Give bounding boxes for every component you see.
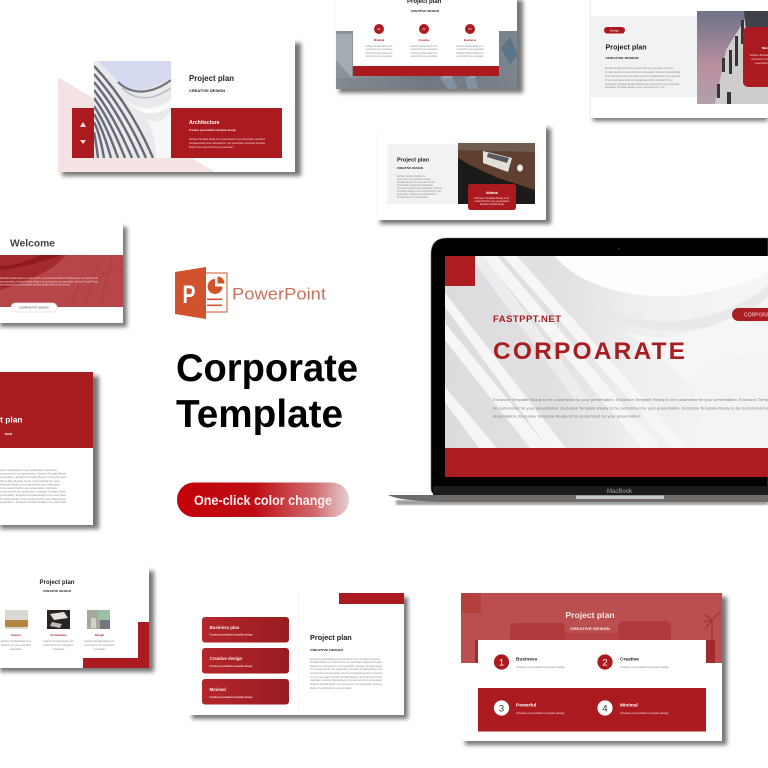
- item: interior: [1, 610, 31, 651]
- feature 4: minimal: Minimal: [620, 702, 638, 708]
- heading: Project plan: [189, 74, 234, 83]
- photo: laptop on desk: [458, 143, 535, 204]
- photo: building: [697, 11, 768, 104]
- column: minimal: customized for your presentation: [366, 54, 393, 58]
- red footer bar: [445, 448, 768, 477]
- MacBook label: MacBook: [607, 489, 633, 495]
- feature 3: powerful: Creative presentation template design: [516, 711, 566, 715]
- body text: to be customized for your presentation. Exclusive: [0, 486, 58, 490]
- banner text: Creative presentation template design: [189, 128, 236, 132]
- body text: customized for your presentation. Exclusive Template Ready: [0, 472, 67, 476]
- red callout card: [743, 27, 768, 87]
- card: creative design: [202, 648, 289, 674]
- red photo band: [0, 255, 123, 307]
- screen body text: Exclusive Template Ready to be customized for your presentation. Exclusive Template Ready to be customized for your presentation. Exclusive Temp: [493, 397, 768, 402]
- screen background: [445, 256, 768, 448]
- grey text panel: [591, 16, 697, 97]
- body text: to be customized for your presentation. Exclusive Template Ready to be customized: [605, 74, 680, 78]
- red header block: [0, 372, 93, 448]
- body text: [605, 66, 681, 89]
- card: minimal: Creative presentation template design: [210, 695, 253, 699]
- column: business: [456, 24, 484, 58]
- laptop screen: [445, 256, 768, 477]
- column: minimal: Exclusive Template Ready to be: [366, 51, 393, 55]
- item: design: Design: [95, 633, 104, 637]
- body text: Exclusive Template Ready to be customized for your presentation. Exclusive: [605, 66, 673, 70]
- body text: Template Ready to be customized for your presentation: [0, 482, 61, 486]
- card: minimal: [202, 679, 289, 704]
- body text: Template Ready to be customized for your presentation. Exclusive Template: [310, 660, 382, 664]
- body text: customized for your presentation. Exclusive Template Ready: [0, 490, 67, 494]
- body text: presentation. Exclusive Template Ready to be customized: [0, 500, 67, 504]
- column: minimal: customized for your presentation: [366, 47, 393, 51]
- card: business plan: Business plan: [210, 625, 240, 630]
- item: interior: customized for your presentation: [1, 643, 31, 647]
- heading: Project plan: [606, 42, 647, 52]
- body text: for your presentation. Exclusive Template Ready to be customized for your: [310, 675, 382, 679]
- column: business: customized for your presentation: [456, 54, 484, 58]
- column: minimal: [366, 24, 393, 58]
- column: business: Business: [464, 38, 477, 42]
- subheading: CREATIVE DESIGN: [43, 589, 71, 593]
- title: [176, 347, 358, 436]
- red footer bar: [353, 66, 499, 76]
- feature 1: business: Creative presentation template design: [516, 665, 566, 669]
- screen pill: [732, 308, 768, 321]
- feature 4: minimal: [597, 700, 670, 716]
- item: architecture: Exclusive Template Ready to be: [44, 639, 74, 643]
- laptop lid: [431, 238, 768, 495]
- subheading: CREATIVE DESIGN: [411, 9, 439, 13]
- heading: Project plan: [565, 610, 615, 620]
- white card: [353, 16, 499, 66]
- column: business: Exclusive Template Ready to be: [456, 51, 484, 55]
- body text: Template Ready to be customized for your: [0, 479, 60, 483]
- slide: interior design: [0, 567, 154, 672]
- body text: Exclusive Template Ready to be customized for your presentation. Exclusive: [310, 657, 380, 661]
- slide: four numbered features: [461, 593, 727, 745]
- column: creative: 02: [423, 27, 426, 31]
- screen body text: presentation. Exclusive Template Ready to be customized for your presentation.: [493, 414, 641, 418]
- column: minimal: Exclusive Template Ready to be: [366, 44, 393, 48]
- body text: Exclusive Template Ready to be customized for your: [605, 85, 665, 89]
- subheading: CREATIVE DESIGN: [397, 166, 423, 170]
- banner text: Exclusive Template Ready to be customized for your presentation. Exclusive: [189, 137, 265, 141]
- body text: Exclusive Template Ready to be: [397, 174, 425, 178]
- item: interior: Exclusive Template Ready to be: [1, 639, 31, 643]
- card: business plan: [202, 617, 289, 642]
- item: design: Exclusive Template Ready to be: [84, 639, 115, 643]
- photo: office devices: [336, 31, 518, 89]
- body text: presentation. Exclusive Template Ready to be customized: [0, 493, 67, 497]
- column: creative: Creative: [418, 38, 430, 42]
- body text: Template Ready to be customized for your: [397, 180, 435, 184]
- item: design: customized for your presentation: [84, 643, 115, 647]
- feature 3: powerful: 3: [499, 704, 504, 714]
- band text: your presentation. Exclusive Template Ready to be customized for your presentation. Exclusive Template Ready: [0, 280, 99, 284]
- band text: to be customized for your presentation. Exclusive Template Ready to be customized: [0, 282, 70, 286]
- red card: [478, 688, 706, 732]
- feature 3: powerful: Powerful: [516, 702, 536, 708]
- body text: customized for your presentation. Exclusive: [397, 177, 431, 181]
- banner text: [189, 120, 265, 149]
- body text: Ready to be customized for your presentation.: [310, 686, 352, 690]
- tag pill: [604, 27, 625, 34]
- item: architecture: presentation: [52, 647, 65, 651]
- screen body text: be customized for your presentation. Exclusive Template Ready to be customized for your presentation. Exclusive Template Ready to be customized for: [493, 406, 768, 410]
- photo: curved architecture: [94, 61, 171, 158]
- grey text panel: [387, 144, 458, 204]
- camera: [618, 248, 620, 250]
- item: design: presentation: [94, 647, 106, 651]
- button: one-click color change: One-click color change: [194, 493, 332, 508]
- item: architecture: Architecture: [50, 633, 67, 637]
- column: business: 03: [469, 27, 472, 31]
- item: design: [84, 610, 115, 651]
- slide: three columns over photo: [336, 0, 523, 93]
- column: creative: customized for your presentation: [410, 54, 438, 58]
- slide: three red cards: [188, 593, 408, 719]
- body text: to be customized for your presentation. Exclusive Template Ready to be: [310, 667, 382, 671]
- feature 4: minimal: Creative presentation template design: [620, 711, 670, 715]
- red corner square: [445, 256, 475, 286]
- column: creative: customized for your presentation: [410, 47, 438, 51]
- column: creative: [410, 24, 438, 58]
- body text: [310, 657, 383, 690]
- column: minimal: 01: [378, 27, 381, 31]
- subheading: CREATIVE DESIGN: [189, 89, 225, 93]
- screen body text: [493, 397, 768, 418]
- wordmark: PowerPoint: [232, 286, 326, 304]
- heading: Project plan: [310, 633, 352, 642]
- heading: t plan: [0, 414, 22, 424]
- red banner: [72, 108, 282, 158]
- body text: presentation. Exclusive Template Ready to be customized: [0, 475, 67, 479]
- feature 1: business: Business: [516, 656, 538, 662]
- body text: to be customized for your presentation. Exclusive: [0, 468, 58, 472]
- subheading: CREATIVE DESIGN: [310, 648, 343, 652]
- item: architecture: [44, 610, 74, 651]
- laptop base: [388, 495, 768, 505]
- red corner shapes: [83, 622, 149, 668]
- body text: Ready to be customized for your presentation. Exclusive Template Ready: [310, 664, 383, 668]
- feature 3: powerful: [494, 700, 566, 716]
- subheading: CREATIVE DESIGN: [570, 627, 611, 631]
- card: creative design: Creative presentation template design: [210, 664, 253, 668]
- body text: for your presentation. Exclusive Template Ready to be customized for your: [605, 78, 673, 82]
- banner text: Template Ready to be customized for your presentation. Exclusive Template: [189, 141, 265, 145]
- red callout card: Exclusive Template Ready to be: [474, 196, 510, 200]
- feature 2: creative: Creative presentation template design: [620, 665, 670, 669]
- title: Corporate: [176, 347, 358, 390]
- item: interior: presentation: [10, 647, 22, 651]
- body text: customized for your presentation. Exclusive Template Ready to be customized: [310, 671, 382, 675]
- banner text: Architecture: [189, 120, 220, 126]
- red callout card: Exclusive Template Ready: [480, 202, 505, 206]
- slide: building project plan: [591, 0, 768, 121]
- site name: FASTPPT.NET: [493, 314, 561, 325]
- body text: [397, 174, 442, 199]
- body text: presentation. Exclusive Template Ready to: [397, 192, 437, 196]
- slide: desk project plan: [377, 124, 551, 224]
- card: minimal: Minimal: [210, 687, 226, 692]
- tag pill: Design: [610, 28, 619, 32]
- body text: Exclusive Template Ready to be customized for your presentation. Exclusive: [310, 682, 382, 686]
- body text: be customized for your presentation.: [397, 195, 429, 199]
- laptop mockup: [388, 238, 768, 505]
- body text: [0, 468, 67, 504]
- button: one-click color change: [177, 482, 349, 517]
- heading: Welcome: [10, 238, 55, 250]
- pill button: CORPORATE DESIGN: [19, 306, 49, 310]
- slide: welcome: [0, 223, 127, 327]
- slide: red header project plan: [0, 372, 99, 529]
- icon: up and down arrows: [80, 122, 86, 144]
- column: minimal: Minimal: [374, 38, 384, 42]
- body text: Template Ready to be customized for your presentation. Exclusive Template Ready: [605, 70, 681, 74]
- feature 4: minimal: 4: [602, 704, 608, 714]
- item: architecture: customized for your presentation: [44, 643, 74, 647]
- card: creative design: Creative design: [210, 656, 243, 661]
- band text: [0, 276, 99, 286]
- body text: presentation. Exclusive Template Ready to be customized for your presentation: [310, 678, 382, 682]
- red callout card: [468, 184, 516, 210]
- body text: Template Ready to be customized for your presentation: [0, 497, 67, 501]
- banner text: Ready to be customized for your presentation.: [189, 145, 234, 149]
- slide: architecture project plan: [58, 38, 301, 176]
- body text: Template Ready to be customized for your: [397, 189, 441, 193]
- logo: PowerPoint: [175, 267, 326, 319]
- white card: [478, 640, 706, 688]
- red callout card: Minimal: [486, 191, 498, 195]
- feature 2: creative: Creative: [620, 656, 639, 662]
- icon: PowerPoint document: P: [182, 281, 196, 309]
- subheading: CREATIVE DESIGN: [606, 56, 638, 60]
- feature 1: business: 1: [499, 658, 504, 668]
- screen heading: CORPOARATE: [493, 338, 685, 365]
- red callout card: customized for your presentation: [474, 199, 510, 203]
- column: creative: Exclusive Template Ready to be: [410, 51, 438, 55]
- heading: Project plan: [397, 158, 430, 164]
- body text: presentation. Exclusive Template Ready to be customized for your presentation.: [605, 82, 680, 86]
- subheading: SIGN: [5, 432, 12, 436]
- feature 2: creative: [597, 654, 670, 670]
- title: Template: [176, 393, 343, 436]
- heading: Project plan: [40, 579, 75, 586]
- body text: to be customized for your presentation. Exclusive: [397, 186, 442, 190]
- column: creative: Exclusive Template Ready to be: [410, 44, 438, 48]
- photo: red sofa header: [461, 593, 722, 663]
- column: business: customized for your presentation: [456, 47, 484, 51]
- feature 2: creative: 2: [602, 658, 608, 668]
- card: business plan: Creative presentation template design: [210, 632, 253, 636]
- feature 1: business: [494, 654, 566, 670]
- body text: presentation. Exclusive Template Ready: [397, 183, 434, 187]
- item: interior: Interior: [11, 633, 22, 637]
- column: business: Exclusive Template Ready to be: [456, 44, 484, 48]
- band text: Exclusive Template Ready to be customized for your presentation. Exclusive Template Ready to be customized for: [0, 276, 98, 280]
- icon: PowerPoint document: [175, 267, 227, 319]
- red corner tab: [339, 593, 404, 604]
